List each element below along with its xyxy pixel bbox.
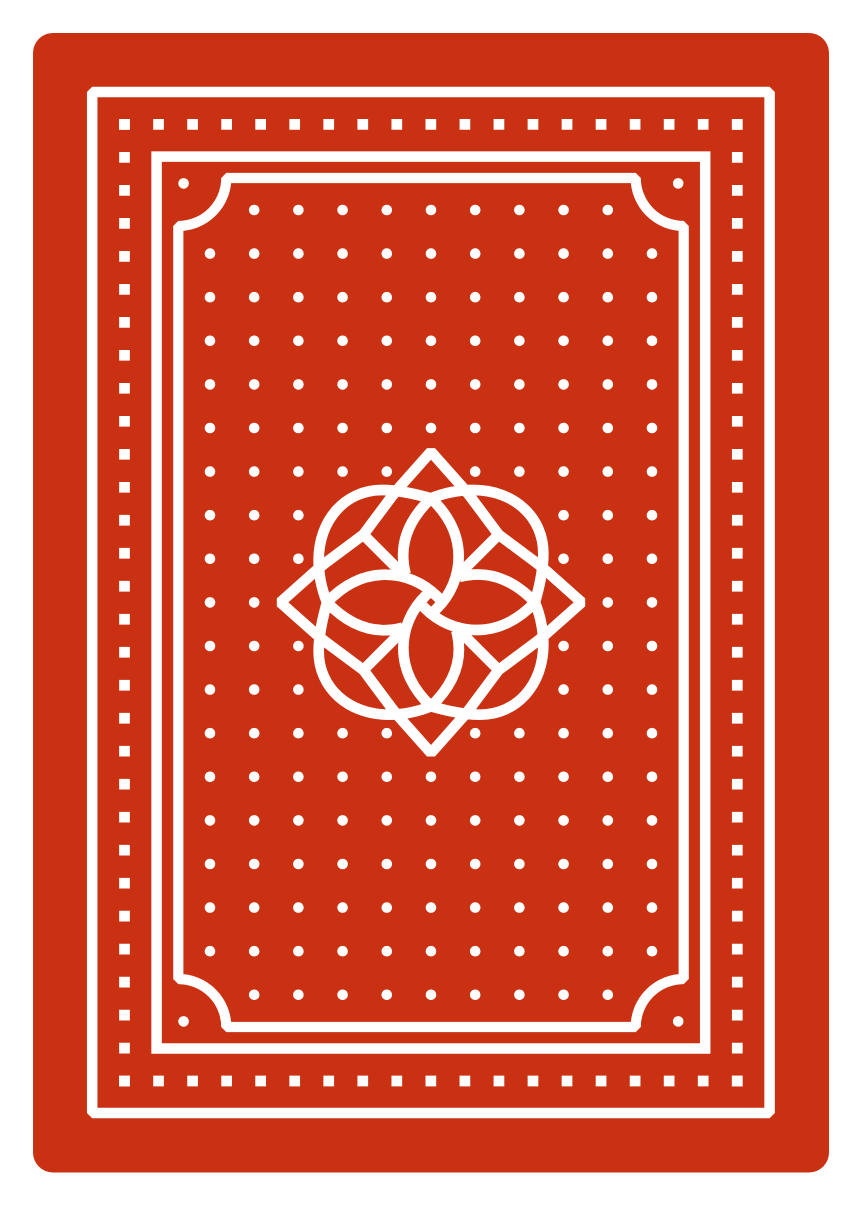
emblem spiral lobe: top right (403, 490, 543, 630)
emblem spiral lobe: bottom left (319, 575, 459, 715)
corner dots (178, 178, 684, 1027)
emblem spiral lobe: bottom right (403, 574, 543, 715)
dot grid (210, 210, 652, 995)
central floral emblem (280, 452, 582, 753)
emblem star outline (280, 452, 582, 753)
square dot border (119, 119, 743, 1086)
emblem diagonal spurs (363, 535, 499, 670)
middle frame (157, 157, 705, 1049)
outer frame (92, 92, 770, 1113)
emblem spiral lobe: top left (319, 490, 459, 630)
inner frame with concave corners (178, 178, 684, 1027)
